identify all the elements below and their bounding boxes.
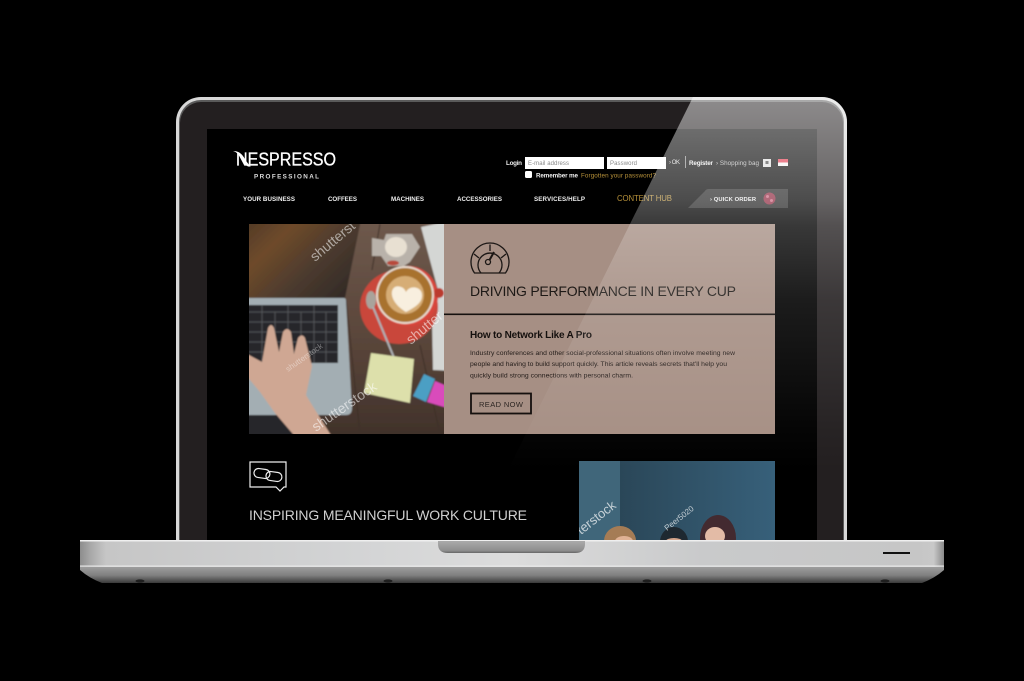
navigation bar xyxy=(243,194,672,203)
navigation bar: MACHINES xyxy=(391,196,424,203)
navigation bar: SERVICES/HELP xyxy=(534,196,585,203)
navigation bar: COFFEES xyxy=(328,196,357,203)
index tabs xyxy=(412,373,444,408)
photo: women at a table xyxy=(579,461,775,540)
infographic: laptop mockup xyxy=(80,97,944,583)
icon: chain link speech bubble xyxy=(250,462,286,491)
screen xyxy=(207,129,817,561)
wood grain xyxy=(346,224,427,376)
read now button xyxy=(471,394,531,414)
article title: How to Network Like A Pro xyxy=(470,330,592,341)
divider xyxy=(444,314,775,315)
hand xyxy=(249,324,332,434)
base underside xyxy=(80,566,944,583)
rubber feet xyxy=(136,579,890,583)
sticky note xyxy=(364,353,414,403)
watermarks: shutter xyxy=(403,307,446,347)
article body: Industry conferences and other social-professional situations often involve meeting new xyxy=(470,350,735,357)
login form: Password xyxy=(610,161,637,167)
screen glare xyxy=(554,97,847,410)
icon: Singapore flag xyxy=(778,159,788,166)
person right xyxy=(700,515,736,540)
icon: shopping bag xyxy=(763,159,771,167)
watermarks: shutterstock xyxy=(284,341,325,374)
paper xyxy=(420,224,444,372)
jug xyxy=(372,234,420,266)
article body: quickly build strong connections with personal charm. xyxy=(470,372,633,380)
login form: Forgotten your password? xyxy=(581,172,656,180)
cup xyxy=(376,266,444,326)
login form: Login xyxy=(506,160,522,167)
trackpad notch xyxy=(438,541,585,553)
watermarks xyxy=(579,502,694,534)
heading: inspiring work culture: INSPIRING MEANINGFUL WORK CULTURE xyxy=(249,507,527,523)
laptop display xyxy=(249,224,360,298)
logo: Nespresso Professional xyxy=(233,150,336,180)
quick order button: › QUICK ORDER xyxy=(710,197,757,203)
read now button: READ NOW xyxy=(479,400,524,409)
site header xyxy=(233,150,788,208)
watermarks: Peer5020 xyxy=(663,504,696,533)
table bottom xyxy=(249,415,292,434)
navigation bar: ACCESSORIES xyxy=(457,196,502,203)
person middle xyxy=(660,527,688,540)
photo: laptop and coffee on table xyxy=(249,224,444,434)
watermarks: shutterst xyxy=(307,217,358,264)
article panel xyxy=(444,224,775,434)
keyboard xyxy=(240,305,338,363)
watermarks: terstock xyxy=(574,497,619,537)
login form: E-mail address xyxy=(528,161,569,167)
watermarks: shutterstock xyxy=(309,377,380,434)
login form xyxy=(506,156,759,180)
navigation bar: CONTENT HUB xyxy=(617,194,672,203)
laptop base xyxy=(80,540,944,583)
login form: › Shopping bag xyxy=(716,160,759,167)
login form: Register xyxy=(689,160,714,167)
base deck xyxy=(80,541,944,567)
article body xyxy=(470,350,735,380)
person left xyxy=(604,526,636,540)
logo: Nespresso Professional: PROFESSIONAL xyxy=(254,174,319,180)
speaker slot xyxy=(883,552,910,554)
spoon xyxy=(366,291,395,360)
quick order button xyxy=(688,189,788,208)
laptop lid xyxy=(176,97,847,540)
article body: people and having to build support quickly. This article reveals secrets that'll help you xyxy=(470,361,727,368)
saucer xyxy=(360,270,438,344)
watermarks xyxy=(284,217,446,434)
logo: Nespresso Professional: NESPRESSO xyxy=(236,150,336,170)
heading: driving performance: DRIVING PERFORMANCE IN EVERY CUP xyxy=(470,283,736,299)
navigation bar: YOUR BUSINESS xyxy=(243,196,295,203)
laptop body xyxy=(240,298,352,415)
login form: Remember me xyxy=(536,172,578,180)
icon: speedometer xyxy=(471,243,509,273)
login form: › OK xyxy=(669,160,680,166)
